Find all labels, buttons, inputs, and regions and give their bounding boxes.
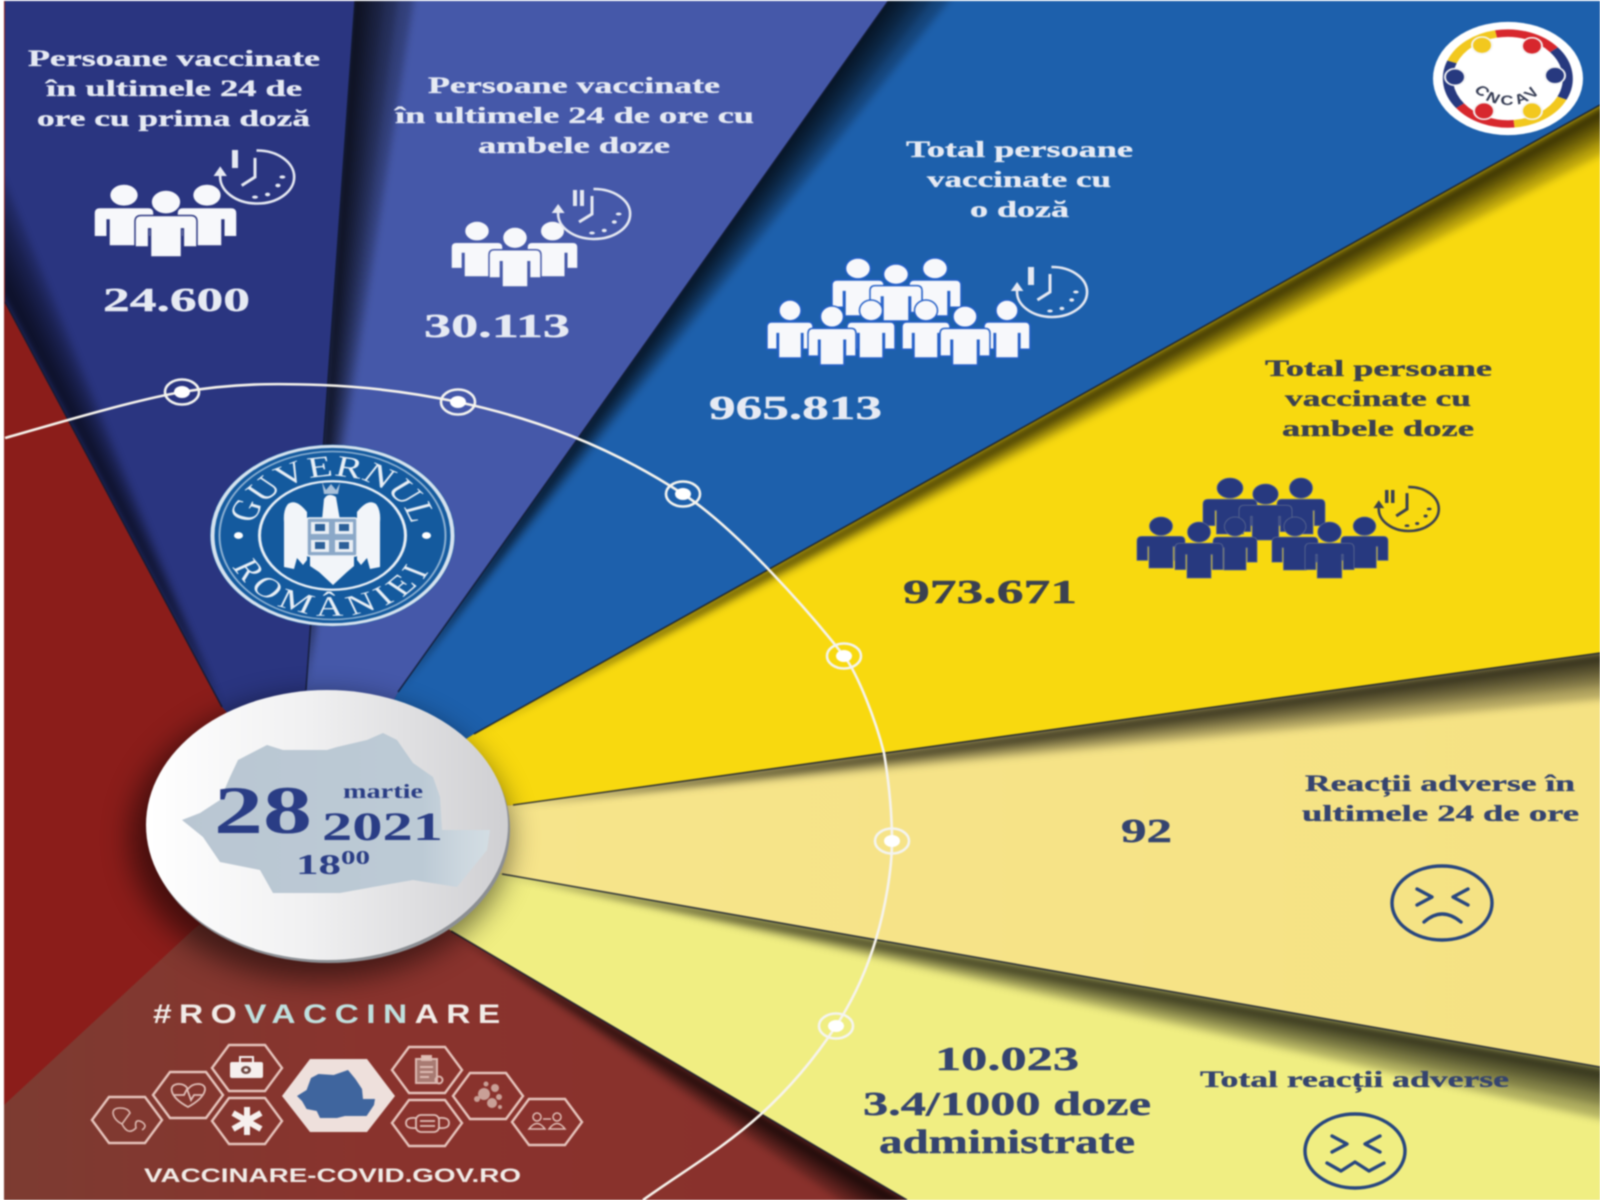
hashtag: #ROVACCINARE: [153, 999, 508, 1029]
icon: virus: [474, 1082, 502, 1109]
heading: [393, 73, 754, 158]
date text: [214, 772, 443, 881]
icon: stethoscope: [113, 1108, 145, 1131]
icon: crowd: [767, 258, 1030, 365]
panel: first dose last 24 hours: [28, 46, 320, 319]
icon: clipboard: [416, 1056, 442, 1084]
panel: both doses last 24 hours: [393, 73, 754, 345]
heading: [906, 137, 1133, 222]
values: 10.023: [935, 1041, 1079, 1078]
panel background: pale yellow ray: [328, 825, 1600, 1200]
panel background: periwinkle ray: [306, 0, 889, 825]
icon: sad face: [1392, 866, 1492, 940]
icon: heart: [172, 1084, 205, 1107]
central date disc: [146, 690, 510, 963]
icon: three people: [94, 184, 237, 257]
heading: Reacții adverse în: [1305, 771, 1575, 797]
icon: clock with dose two: [552, 189, 630, 239]
panel: adverse reactions last 24 hours: [1121, 771, 1579, 940]
date text: 28: [214, 772, 312, 848]
value: 30.113: [424, 308, 570, 345]
icon: crowd: [1137, 478, 1388, 578]
heading: [1302, 771, 1579, 826]
panel background: navy ray: [5, 0, 355, 825]
heading: Total reacții adverse: [1200, 1067, 1509, 1093]
values: 3.4/1000 doze: [863, 1086, 1151, 1123]
icon: clock with dose one: [1011, 267, 1087, 317]
values: administrate: [879, 1124, 1135, 1161]
value: 973.671: [903, 574, 1077, 611]
panel: total one dose: [709, 137, 1133, 427]
date text: 2021: [322, 804, 443, 849]
heading: ore cu prima doză: [37, 106, 311, 131]
icon: star of life: [233, 1107, 261, 1135]
logo: Government of Romania seal: [209, 444, 456, 627]
website url: VACCINARE-COVID.GOV.RO: [144, 1166, 521, 1187]
heading: o doză: [970, 197, 1070, 222]
heading: [28, 46, 320, 131]
logo: CNCAV: [1432, 20, 1584, 136]
heading: [1265, 356, 1492, 441]
panel background: yellow ray: [328, 105, 1600, 825]
eagle emblem: [284, 482, 380, 585]
value: 965.813: [709, 390, 882, 427]
value: 24.600: [103, 282, 250, 319]
heading: Total persoane: [906, 137, 1133, 162]
heading: vaccinate cu: [1285, 386, 1471, 411]
heading: ultimele 24 de ore: [1302, 801, 1579, 826]
icon: three people: [451, 221, 578, 287]
panel background: blue ray: [328, 0, 1600, 825]
date text: 18: [296, 849, 341, 881]
heading: în ultimele 24 de ore cu: [393, 103, 754, 128]
heading: Persoane vaccinate: [428, 73, 720, 98]
disc shadow: [130, 696, 510, 980]
map of Romania: [182, 733, 490, 893]
logo: Government of Romania seal: GUVERNUL: [231, 455, 434, 523]
logo: Government of Romania seal: ROMÂNIEI: [232, 557, 429, 617]
heading: ambele doze: [478, 133, 670, 158]
date text: martie: [343, 781, 423, 803]
heading: vaccinate cu: [927, 167, 1111, 192]
heading: ambele doze: [1282, 416, 1474, 441]
heading: Total persoane: [1265, 356, 1492, 381]
value: 92: [1121, 813, 1172, 850]
panel: total adverse reactions: [863, 1041, 1509, 1188]
timeline arc with markers: [5, 380, 909, 1200]
panel background: light orange ray: [328, 653, 1600, 1067]
heading: Persoane vaccinate: [28, 46, 320, 71]
icon: clock with dose one: [214, 150, 294, 203]
icon: medical camera: [230, 1057, 263, 1078]
icon: mask: [406, 1115, 449, 1132]
big hexagon with map: [282, 1059, 395, 1132]
date text: 00: [341, 847, 370, 869]
icon: people: [529, 1113, 565, 1129]
hexagon icon cluster: [92, 1045, 582, 1146]
icon: sick face: [1305, 1114, 1405, 1188]
heading: în ultimele 24 de: [44, 76, 302, 101]
values: [863, 1041, 1151, 1161]
panel background: brown campaign area: [4, 825, 907, 1200]
panel: total both doses: [903, 356, 1492, 611]
logo: CNCAV: CNCAV: [1475, 85, 1538, 106]
icon: clock with dose two: [1373, 487, 1439, 531]
